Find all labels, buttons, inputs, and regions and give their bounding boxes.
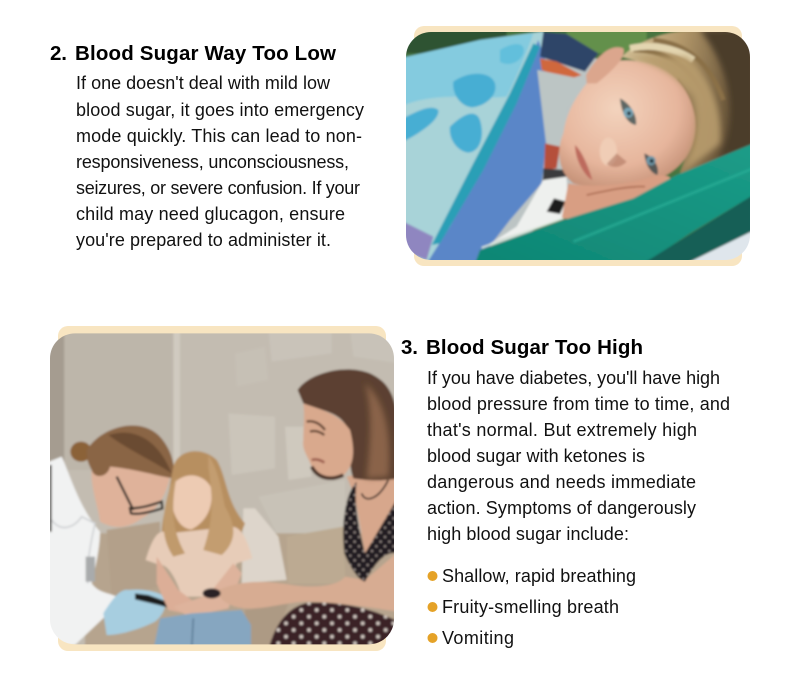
text block: low blood sugar description: child may need glucagon, ensure [76,204,345,224]
orange lining [540,58,582,80]
text block: high blood sugar description: that's normal. But extremely high [427,420,697,440]
doctor face [91,464,170,527]
heading: blood sugar way too low: Blood Sugar Way Too Low [75,42,336,65]
mother hair [298,369,399,480]
photo: boy lying under towel [400,27,757,267]
girl [146,451,252,650]
text block: low blood sugar description: mode quickly. This can lead to non- [76,126,362,146]
text block: low blood sugar description: blood sugar, it goes into emergency [76,100,364,120]
mother arm and hand [218,552,398,612]
cream backing card: top photo [414,26,742,266]
text block: low blood sugar description [76,73,364,250]
doctor gloves [103,590,165,635]
navy hood [540,32,598,72]
boy nose and lips [600,138,617,166]
cream backing card: bottom photo [58,326,386,651]
boy hair [622,28,753,173]
girl face [171,475,212,529]
text block: high blood sugar description: blood pressure from time to time, and [427,394,730,414]
ear [586,47,624,83]
text block: high blood sugar description [427,368,730,544]
bullet: vomiting: Vomiting [442,628,514,648]
girl shirt [146,527,252,597]
text block: high blood sugar description: high blood sugar include: [427,524,629,544]
sofa [85,533,398,650]
text block: high blood sugar description: If you have diabetes, you'll have high [427,368,720,388]
heading: blood sugar too high: Blood Sugar Too High [426,336,643,359]
room wall [45,330,398,650]
mother dress [343,482,398,582]
heading: blood sugar too high: 3. [401,336,418,359]
hair fringe on face edge [623,56,721,173]
girl hair back [160,450,246,534]
bullet: shallow breathing: Shallow, rapid breathing [442,566,636,586]
text block: low blood sugar description: you're prepared to administer it. [76,230,331,250]
text block: high blood sugar description: blood sugar with ketones is [427,446,645,466]
girl hair strands [164,477,185,557]
doctor glasses [117,477,162,514]
background foliage [406,32,750,248]
doctor white coat [45,457,117,648]
mother polka dot skirt [268,603,398,650]
mother [203,369,399,650]
text block: low blood sugar description: seizures, or severe confusion. If your [76,178,360,198]
glucose meter [135,593,172,608]
text block: high blood sugar description: dangerous and needs immediate [427,472,696,492]
mother neck and chest [346,475,394,554]
text block: low blood sugar description: If one doesn't deal with mild low [76,73,331,93]
boy eyes [620,98,636,125]
text block: high blood sugar description: action. Symptoms of dangerously [427,498,696,518]
boy face [559,60,696,187]
hands [562,175,670,219]
white shirt and black tag [480,177,568,250]
bullet: fruity breath: Fruity-smelling breath [442,597,619,617]
towel [400,31,547,263]
teal hammock [475,143,753,263]
heading: blood sugar way too low: 2. [50,42,67,65]
section 2: blood sugar way too low [50,42,364,250]
base under towel and shirt [490,56,598,248]
grey shirt [536,68,574,142]
girl jeans [154,609,252,644]
doctor [45,426,174,648]
mother thumb device [203,588,221,598]
towel blue border [427,40,550,263]
mother face [303,403,353,478]
bullet list: symptoms [428,566,636,648]
doctor hair and bun [70,442,92,462]
section 3: blood sugar too high [401,336,730,648]
text block: low blood sugar description: responsiveness, unconsciousness, [76,152,349,172]
girl arms [157,557,192,613]
photo: doctor testing girl's blood sugar with mother [45,330,399,650]
